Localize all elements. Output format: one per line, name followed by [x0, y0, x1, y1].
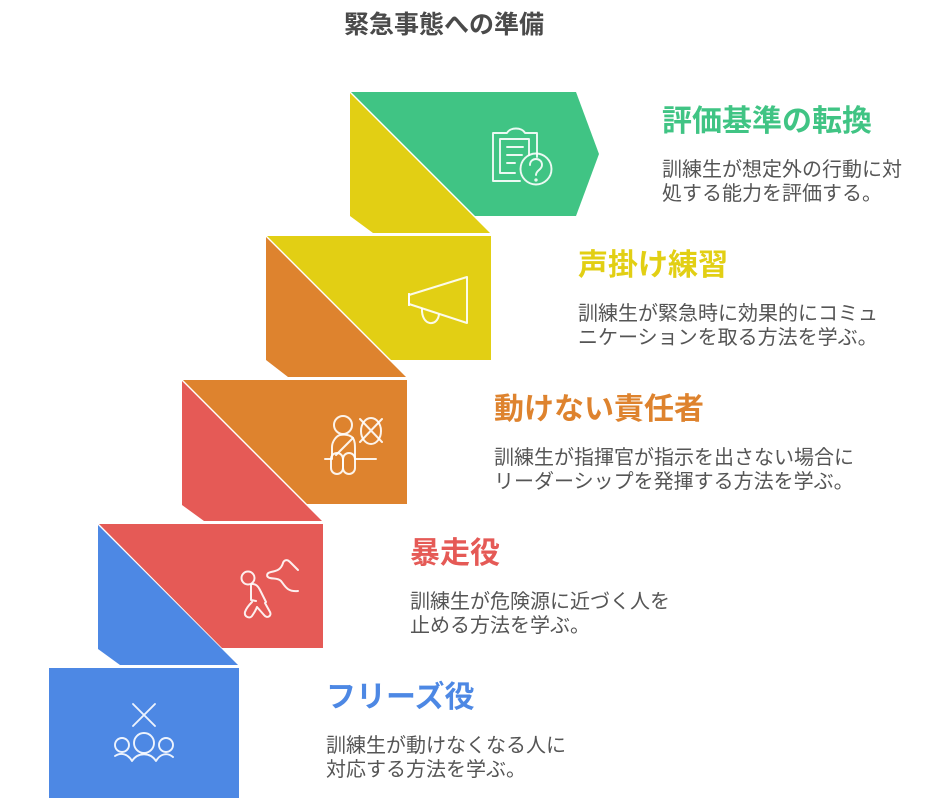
step: red fold	[182, 381, 322, 521]
text block: 暴走役: 止める方法を学ぶ。	[410, 615, 590, 637]
icon: megaphone	[409, 277, 467, 323]
title: 緊急事態への準備	[344, 11, 544, 39]
text block: 暴走役	[410, 537, 670, 637]
text block: 動けない責任者: 訓練生が指揮官が指示を出さない場合に	[494, 447, 854, 469]
text block: フリーズ役: フリーズ役	[326, 681, 474, 714]
text block: 声掛け練習: 訓練生が緊急時に効果的にコミュ	[578, 303, 878, 325]
text block: 評価基準の転換: 処する能力を評価する。	[662, 183, 882, 205]
step: orange fold	[266, 237, 406, 377]
text block: フリーズ役	[326, 680, 566, 781]
step: orange panel	[183, 380, 407, 504]
text block: 評価基準の転換: 評価基準の転換	[662, 105, 872, 138]
text block: 声掛け練習: ニケーションを取る方法を学ぶ。	[578, 327, 878, 349]
text block: 声掛け練習	[578, 249, 878, 349]
text block: 暴走役: 暴走役	[410, 537, 500, 570]
text block: 声掛け練習: 声掛け練習	[578, 249, 728, 282]
text block: 動けない責任者: 動けない責任者	[494, 393, 704, 426]
text block: 暴走役: 訓練生が危険源に近づく人を	[410, 591, 670, 613]
step: yellow panel	[267, 236, 491, 360]
text block: 評価基準の転換: 訓練生が想定外の行動に対	[662, 159, 902, 181]
text block: 動けない責任者: リーダーシップを発揮する方法を学ぶ。	[494, 471, 854, 493]
step: green panel	[351, 92, 599, 216]
step: blue panel	[49, 668, 239, 798]
icon: group of people with cross	[115, 704, 173, 761]
text block: 動けない責任者	[494, 393, 854, 493]
step: red panel	[99, 524, 323, 648]
step: blue fold	[98, 525, 238, 665]
icon: seated person with crossed-out circle	[325, 416, 382, 474]
text block: 評価基準の転換	[662, 105, 902, 205]
step: yellow fold	[350, 93, 490, 233]
text block: フリーズ役: 対応する方法を学ぶ。	[326, 759, 526, 781]
icon: clipboard with question mark	[493, 128, 552, 184]
text block: フリーズ役: 訓練生が動けなくなる人に	[326, 735, 566, 757]
icon: running person with wind	[242, 560, 298, 617]
